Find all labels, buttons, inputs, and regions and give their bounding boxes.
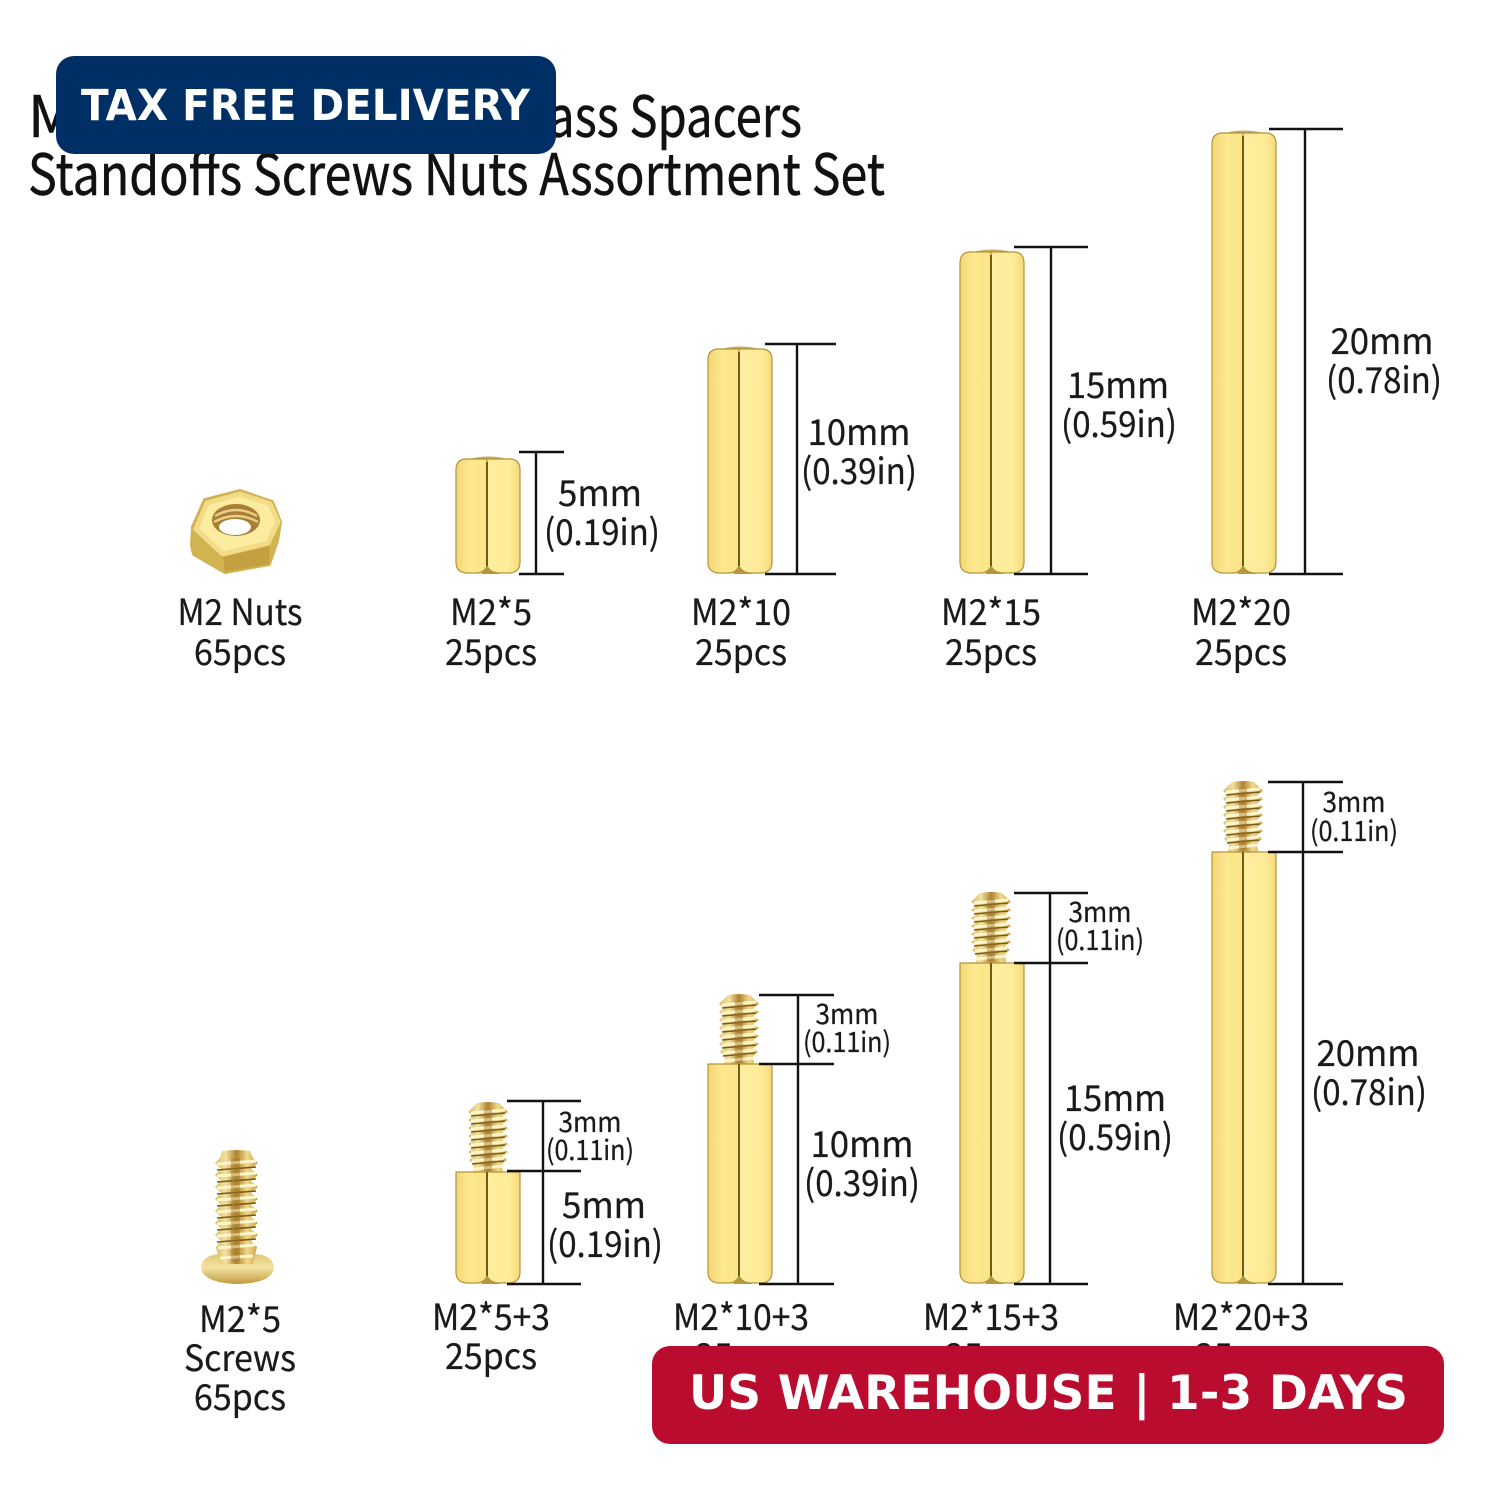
title: ass Spacers (548, 72, 802, 154)
label: M2*20+3: M2*20+3 (1173, 1289, 1309, 1341)
spacer M2*10 (708, 346, 772, 574)
dimension: 3mm + 20mm: (0.78in) (1311, 1064, 1427, 1116)
dimension: 3mm + 20mm: 20mm (1316, 1025, 1420, 1077)
dimension: 3mm + 10mm: 10mm (810, 1116, 914, 1168)
dimension: 3mm + 10mm: 3mm (816, 993, 878, 1033)
label: M2*15 (941, 584, 1041, 676)
label: M2*5+3: 25pcs (445, 1328, 537, 1380)
dimension: 20mm: 20mm (1330, 313, 1434, 365)
standoff M2*20+3 (1212, 781, 1276, 1284)
dimension: 3mm + 5mm: 3mm (558, 1101, 622, 1141)
icon: hex nut (192, 491, 280, 572)
badge: tax free delivery (56, 56, 556, 154)
label: M2*5 (445, 584, 537, 676)
label: M2*20: 25pcs (1195, 624, 1287, 676)
label: M2*5: M2*5 (450, 584, 532, 636)
label: M2*15+3 (923, 1289, 1059, 1380)
label: M2*5: 25pcs (445, 624, 537, 676)
dimension: 15mm (1014, 247, 1177, 574)
dimension: 10mm: 10mm (808, 404, 910, 456)
dimension: 3mm + 15mm (1014, 891, 1173, 1284)
title: Standoffs Screws Nuts Assortment Set (28, 130, 885, 212)
label: M2*5 Screws: Screws (184, 1330, 296, 1382)
badge: us warehouse (652, 1346, 1444, 1444)
dimension: 3mm + 20mm: (0.11in) (1310, 810, 1398, 850)
dimension: 3mm + 15mm: 3mm (1068, 891, 1132, 931)
label: M2*5+3 (432, 1289, 550, 1380)
label: M2*10 (691, 584, 791, 676)
badge: tax free delivery: TAX FREE DELIVERY (81, 81, 531, 131)
label: M2*20 (1191, 584, 1291, 676)
dimension: 3mm + 10mm: (0.39in) (804, 1155, 920, 1207)
label: M2*20+3: 25pcs (1195, 1328, 1287, 1380)
title (28, 72, 885, 212)
dimension: 10mm (765, 344, 917, 574)
label: M2*15+3: 25pcs (945, 1328, 1037, 1380)
label: M2*15: M2*15 (941, 584, 1041, 636)
dimension: 20mm: (0.78in) (1326, 352, 1442, 404)
dimension: 15mm: 15mm (1067, 357, 1169, 409)
icon: screw (201, 1150, 274, 1284)
dimension: 3mm + 10mm: (0.11in) (803, 1021, 891, 1061)
dimension: 3mm + 5mm (507, 1101, 663, 1284)
dimension: 3mm + 10mm (759, 993, 920, 1284)
label: M2*5 Screws: 65pcs (194, 1369, 286, 1421)
dimension: 3mm + 20mm (1268, 781, 1427, 1284)
spacer M2*5 (456, 456, 520, 574)
dimension: 3mm + 15mm: 15mm (1064, 1070, 1166, 1122)
standoff M2*15+3 (960, 892, 1024, 1284)
label: M2*15+3: M2*15+3 (923, 1289, 1059, 1341)
spacer M2*15 (960, 250, 1024, 574)
label: M2 Nuts (178, 584, 302, 676)
dimension: 15mm: (0.59in) (1061, 396, 1177, 448)
label: M2*10+3: 25pcs (695, 1328, 787, 1380)
dimension: 3mm + 5mm: (0.11in) (546, 1129, 634, 1169)
dimension: 5mm: (0.19in) (544, 504, 660, 556)
dimension: 3mm + 5mm: (0.19in) (547, 1216, 663, 1268)
label: M2 Nuts: 65pcs (194, 624, 286, 676)
label: M2*5+3: M2*5+3 (432, 1289, 550, 1341)
dimension: 5mm (519, 452, 660, 574)
dimension: 3mm + 20mm: 3mm (1322, 781, 1386, 821)
dimension: 20mm (1269, 129, 1442, 574)
standoff M2*5+3 (456, 1102, 520, 1284)
title: M2 Male Female Br (28, 72, 529, 154)
label: M2*10: M2*10 (691, 584, 791, 636)
label: M2*5 Screws (184, 1291, 296, 1421)
label: M2*10+3 (673, 1289, 809, 1380)
dimension: 5mm: 5mm (558, 465, 642, 517)
dimension: 10mm: (0.39in) (801, 443, 917, 495)
dimension: 3mm + 5mm: 5mm (562, 1177, 646, 1229)
label: M2*5 Screws: M2*5 (199, 1291, 281, 1343)
label: M2*20: M2*20 (1191, 584, 1291, 636)
label: M2*10+3: M2*10+3 (673, 1289, 809, 1341)
standoff M2*10+3 (708, 994, 772, 1284)
label: M2*20+3 (1173, 1289, 1309, 1380)
badge: us warehouse: US WAREHOUSE | 1-3 DAYS (689, 1366, 1408, 1421)
dimension: 3mm + 15mm: (0.11in) (1056, 919, 1144, 959)
dimension: 3mm + 15mm: (0.59in) (1057, 1109, 1173, 1161)
label: M2 Nuts: M2 Nuts (178, 584, 302, 636)
label: M2*10: 25pcs (695, 624, 787, 676)
label: M2*15: 25pcs (945, 624, 1037, 676)
spacer M2*20 (1212, 130, 1276, 574)
